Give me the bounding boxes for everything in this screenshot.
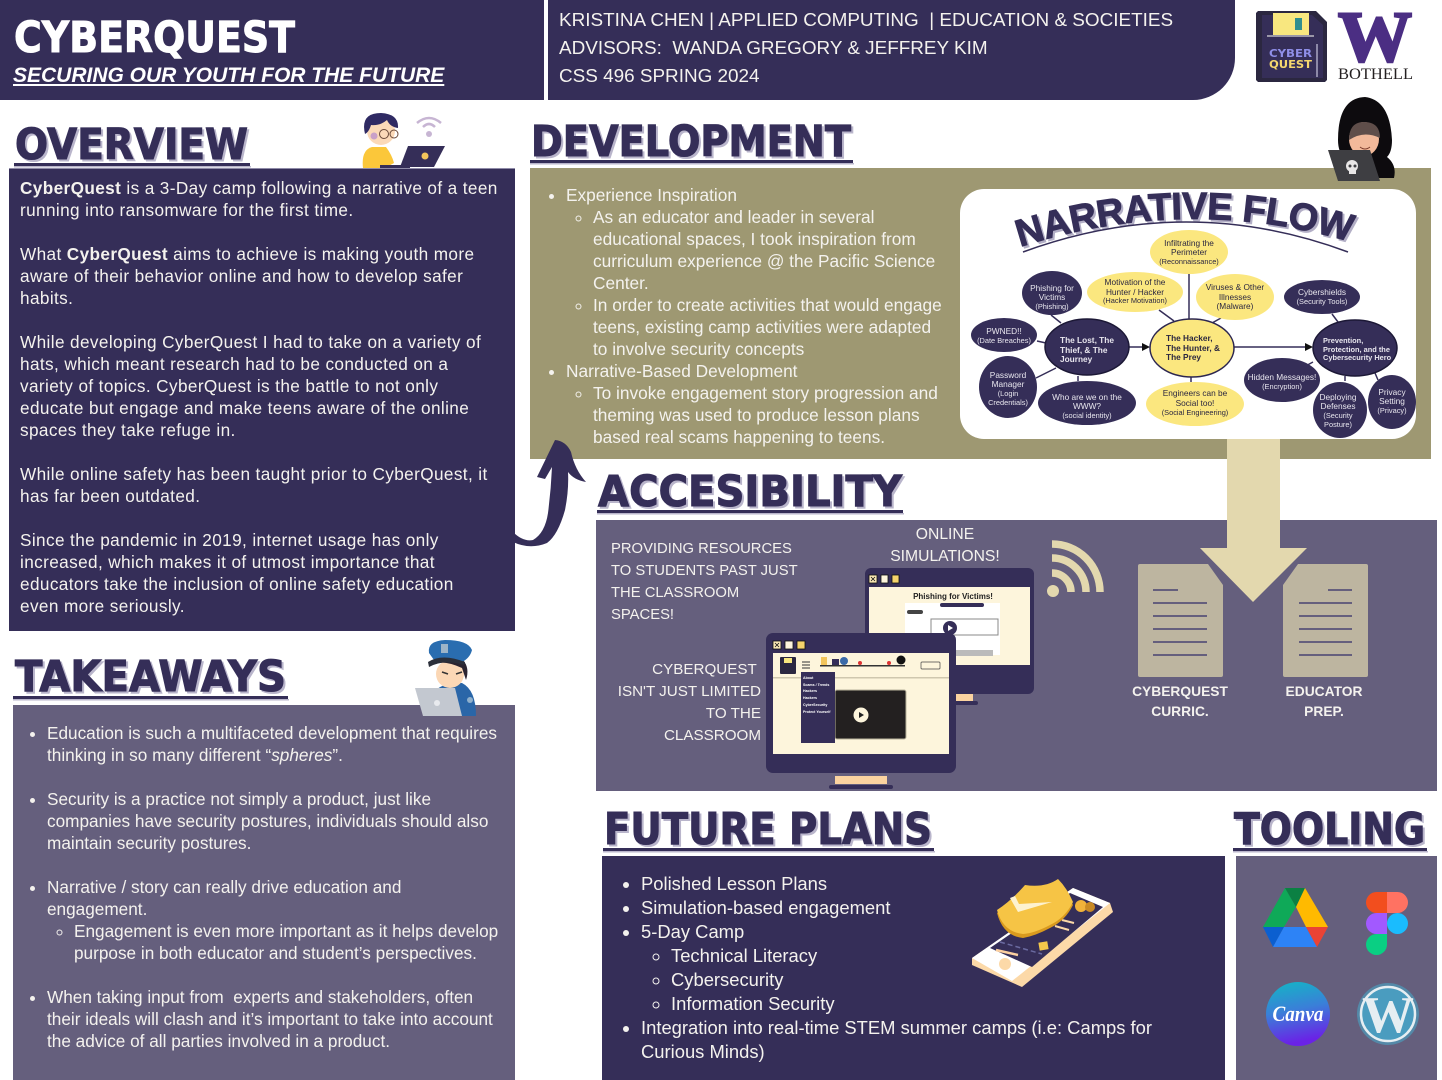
text: W xyxy=(1362,987,1414,1044)
navy node labels: Protection, and the xyxy=(1323,345,1390,354)
illustration: back monitor with phishing simulation xyxy=(865,568,1034,705)
author text: ADVISORS: WANDA GREGORY & JEFFREY KIM xyxy=(559,38,988,59)
flow arrowheads xyxy=(1142,343,1313,351)
navy node labels: Journey xyxy=(1060,354,1093,364)
navy node labels: Thief, & The xyxy=(1060,345,1108,355)
future plans list: Polished Lesson Plans xyxy=(641,873,827,894)
takeaways list: engagement. xyxy=(47,899,147,919)
icon: canva xyxy=(1266,982,1330,1046)
resources text xyxy=(611,541,798,623)
yellow node labels: The Prey xyxy=(1166,352,1201,362)
online simulations text: SIMULATIONS! xyxy=(890,548,1000,565)
navy node labels: (social identity) xyxy=(1062,411,1112,420)
connectors xyxy=(1036,274,1378,382)
icon: phone with security shield xyxy=(972,879,1113,987)
label: educator preparation: PREP. xyxy=(1304,704,1344,719)
text: Canva xyxy=(1272,1001,1324,1026)
navy node labels: Manager xyxy=(992,379,1025,389)
development list: educational spaces, I took inspiration from xyxy=(593,229,916,249)
resources text: SPACES! xyxy=(611,607,674,623)
panel: accessibility xyxy=(596,520,1437,791)
yellow node labels: Motivation of the xyxy=(1105,277,1166,287)
overview text: CyberQuest is a 3-Day camp following a narrative of a teen xyxy=(20,178,498,198)
development list: As an educator and leader in several xyxy=(593,207,874,227)
takeaways list: When taking input from experts and stakeholders, often xyxy=(47,987,473,1007)
panel: tooling xyxy=(1236,856,1437,1080)
resources text: THE CLASSROOM xyxy=(611,585,739,601)
online simulations text xyxy=(890,526,1000,565)
yellow node labels: Perimeter xyxy=(1171,247,1207,257)
icon: wordpress xyxy=(1357,983,1419,1045)
future plans list: Information Security xyxy=(671,993,835,1014)
future plans list: Curious Minds) xyxy=(641,1041,765,1062)
arrow: curved arrow from overview to accessibility xyxy=(515,440,586,546)
author text: KRISTINA CHEN | APPLIED COMPUTING | EDUCATION & SOCIETIES xyxy=(559,10,1173,31)
icon: google drive xyxy=(1263,888,1328,947)
icon: wifi signal xyxy=(1047,540,1104,597)
text: CyberSecurity xyxy=(803,703,827,707)
takeaways list: companies have security postures, individuals should also xyxy=(47,811,488,831)
yellow node labels: Viruses & Other xyxy=(1206,282,1264,292)
narrative flow title: NARRATIVE FLOW xyxy=(1014,192,1359,249)
label: educator preparation: EDUCATOR xyxy=(1286,684,1362,699)
resources text: PROVIDING RESOURCES xyxy=(611,541,792,557)
overview text: has far been outdated. xyxy=(20,486,200,506)
header: project title panel xyxy=(0,0,544,100)
navy node labels: (Date Breaches) xyxy=(977,336,1031,345)
navy node labels: Phishing for xyxy=(1030,283,1074,293)
development list: Center. xyxy=(593,273,649,293)
yellow node labels: (Malware) xyxy=(1217,301,1254,311)
navy node labels: (Login xyxy=(998,389,1018,398)
navy node labels: PWNED!! xyxy=(986,326,1022,336)
development list: To invoke engagement story progression and xyxy=(593,383,938,403)
text: Hackers xyxy=(803,696,817,700)
navy node labels: Defenses xyxy=(1320,401,1356,411)
development list xyxy=(549,185,942,447)
yellow node labels: Illnesses xyxy=(1219,292,1251,302)
panel: takeaways xyxy=(13,705,515,1080)
overview text: habits. xyxy=(20,288,73,308)
navy node labels: Hidden Messages! xyxy=(1248,372,1316,382)
author text xyxy=(559,10,1173,87)
future plans list: Simulation-based engagement xyxy=(641,897,890,918)
takeaways list: Education is such a multifaceted development that requires xyxy=(47,723,497,743)
navy node labels: (Phishing) xyxy=(1035,302,1069,311)
future plans list: Technical Literacy xyxy=(671,945,817,966)
heading: future plans: FUTURE PLANS xyxy=(604,804,932,855)
classroom text: TO THE xyxy=(706,705,761,722)
icon: hooded hacker with laptop xyxy=(1328,97,1395,181)
navy node labels: Victims xyxy=(1039,292,1065,302)
yellow node labels xyxy=(1103,238,1264,417)
development list: curriculum experience @ the Pacific Science xyxy=(593,251,935,271)
yellow node labels: Hunter / Hacker xyxy=(1106,287,1164,297)
online simulations text: ONLINE xyxy=(916,526,974,543)
label: cyberquest curriculum xyxy=(1132,684,1228,719)
overview text xyxy=(20,178,498,616)
future plans list xyxy=(623,873,1152,1062)
yellow nodes xyxy=(1087,230,1274,426)
yellow node labels: (Social Engineering) xyxy=(1162,408,1228,417)
illustration: front monitor with camp website xyxy=(766,633,956,789)
navy node labels: (Security xyxy=(1323,411,1353,420)
navy node labels: Cybersecurity Hero xyxy=(1323,353,1392,362)
future plans list: Integration into real-time STEM summer camps (i.e: Camps for xyxy=(641,1017,1152,1038)
takeaways list: Security is a practice not simply a product, just like xyxy=(47,789,431,809)
development list: Narrative-Based Development xyxy=(566,361,797,381)
icon: document cyberquest curriculum xyxy=(1138,564,1223,677)
future plans list: Cybersecurity xyxy=(671,969,783,990)
development list: In order to create activities that would engage xyxy=(593,295,942,315)
yellow node labels: The Hunter, & xyxy=(1166,343,1220,353)
navy node labels: Who are we on the xyxy=(1052,392,1122,402)
overview text: While developing CyberQuest I had to take on a variety of xyxy=(20,332,481,352)
heading: development: DEVELOPMENT xyxy=(531,117,852,167)
navy node labels: Credentials) xyxy=(988,398,1028,407)
heading: accessibility: ACCESIBILITY xyxy=(598,467,903,517)
development list: to involve security concepts xyxy=(593,339,804,359)
navy node labels: Prevention, xyxy=(1323,336,1363,345)
overview text: even more seriously. xyxy=(20,596,185,616)
takeaways list: Engagement is even more important as it helps develop xyxy=(74,921,498,941)
label: educator preparation xyxy=(1286,684,1362,719)
navy node labels: (Privacy) xyxy=(1377,406,1407,415)
text: About xyxy=(803,676,814,680)
title: CYBERQUEST xyxy=(14,13,296,63)
panel: future plans xyxy=(602,856,1225,1080)
heading: takeaways: TAKEAWAYS xyxy=(15,652,286,702)
yellow node labels: Social too! xyxy=(1176,398,1214,408)
header: author and advisors panel xyxy=(548,0,1235,100)
navy node labels: Password xyxy=(990,370,1027,380)
development list: Experience Inspiration xyxy=(566,185,737,205)
resources text: TO STUDENTS PAST JUST xyxy=(611,563,798,579)
classroom text: CYBERQUEST xyxy=(652,661,757,678)
classroom text: ISN'T JUST LIMITED xyxy=(618,683,761,700)
takeaways list: their ideals will clash and it’s important to take into account xyxy=(47,1009,493,1029)
navy node labels: The Lost, The xyxy=(1060,335,1114,345)
icon: UW Bothell logo xyxy=(1338,0,1413,83)
development list: teens, existing camp activities were adapted xyxy=(593,317,931,337)
author text: CSS 496 SPRING 2024 xyxy=(559,66,760,87)
navy node labels: WWW? xyxy=(1073,401,1101,411)
subtitle: SECURING OUR YOUTH FOR THE FUTURE xyxy=(13,64,444,87)
navy node labels: (Encryption) xyxy=(1262,382,1302,391)
icon: police officer with laptop xyxy=(415,640,476,716)
overview text: aware of their behavior online and how to develop safer xyxy=(20,266,463,286)
yellow node labels: (Reconnaissance) xyxy=(1159,257,1219,266)
label: cyberquest curriculum: CURRIC. xyxy=(1151,704,1209,719)
future plans list: 5-Day Camp xyxy=(641,921,744,942)
yellow node labels: (Hacker Motivation) xyxy=(1103,296,1167,305)
yellow node labels: The Hacker, xyxy=(1166,333,1213,343)
navy node labels: Deploying xyxy=(1320,392,1357,402)
overview text: running into ransomware for the first time. xyxy=(20,200,354,220)
takeaways list: the advice of all parties involved in a product. xyxy=(47,1031,390,1051)
text: Scams / Trends xyxy=(803,683,829,687)
overview text: What CyberQuest aims to achieve is making youth more xyxy=(20,244,474,264)
yellow node labels: Engineers can be xyxy=(1163,388,1228,398)
navy nodes xyxy=(971,271,1416,438)
navy node labels xyxy=(977,283,1407,429)
development list: theming was used to produce lesson plans xyxy=(593,405,920,425)
takeaways list: Narrative / story can really drive education and xyxy=(47,877,401,897)
text: Hackers xyxy=(803,689,817,693)
overview text: educate but engage and make teens aware of the online xyxy=(20,398,469,418)
overview text: increased, which makes it of utmost importance that xyxy=(20,552,435,572)
navy node labels: Privacy xyxy=(1378,387,1406,397)
panel: narrative flow diagram xyxy=(960,189,1416,439)
navy node labels: Posture) xyxy=(1324,420,1352,429)
text: BOTHELL xyxy=(1338,66,1413,83)
overview text: spaces they take refuge in. xyxy=(20,420,236,440)
overview text: educators take the inclusion of online safety education xyxy=(20,574,454,594)
takeaways list xyxy=(30,723,498,1051)
overview text: hats, which meant research had to be conducted on a xyxy=(20,354,448,374)
icon: student with laptop xyxy=(362,113,445,168)
navy node labels: Cybershields xyxy=(1298,287,1346,297)
text: Protect Yourself xyxy=(803,710,831,714)
heading: overview: OVERVIEW xyxy=(15,120,248,170)
icon: document educator preparation xyxy=(1283,564,1368,677)
icon: cyberquest floppy logo xyxy=(1256,11,1327,82)
takeaways list: maintain security postures. xyxy=(47,833,251,853)
text: CYBER xyxy=(1269,47,1313,60)
panel: overview xyxy=(9,168,515,631)
yellow node labels: Infiltrating the xyxy=(1164,238,1214,248)
takeaways list: purpose in both educator and student’s perspectives. xyxy=(74,943,477,963)
development list: based real scams happening to teens. xyxy=(593,427,885,447)
icon: figma xyxy=(1366,892,1408,955)
navy node labels: (Security Tools) xyxy=(1297,297,1347,306)
arrow: large cream arrow down xyxy=(1200,439,1307,602)
overview text: While online safety has been taught prior to CyberQuest, it xyxy=(20,464,488,484)
classroom text: CLASSROOM xyxy=(664,727,761,744)
overview text: Since the pandemic in 2019, internet usage has only xyxy=(20,530,439,550)
overview text: variety of topics. CyberQuest is the battle to not only xyxy=(20,376,438,396)
navy node labels: Setting xyxy=(1379,396,1405,406)
classroom text xyxy=(618,661,761,744)
text: Phishing for Victims! xyxy=(913,592,993,601)
text: QUEST xyxy=(1269,58,1313,71)
takeaways list: thinking in so many different “spheres”. xyxy=(47,745,343,765)
label: cyberquest curriculum: CYBERQUEST xyxy=(1132,684,1228,699)
panel: development xyxy=(530,168,1431,459)
